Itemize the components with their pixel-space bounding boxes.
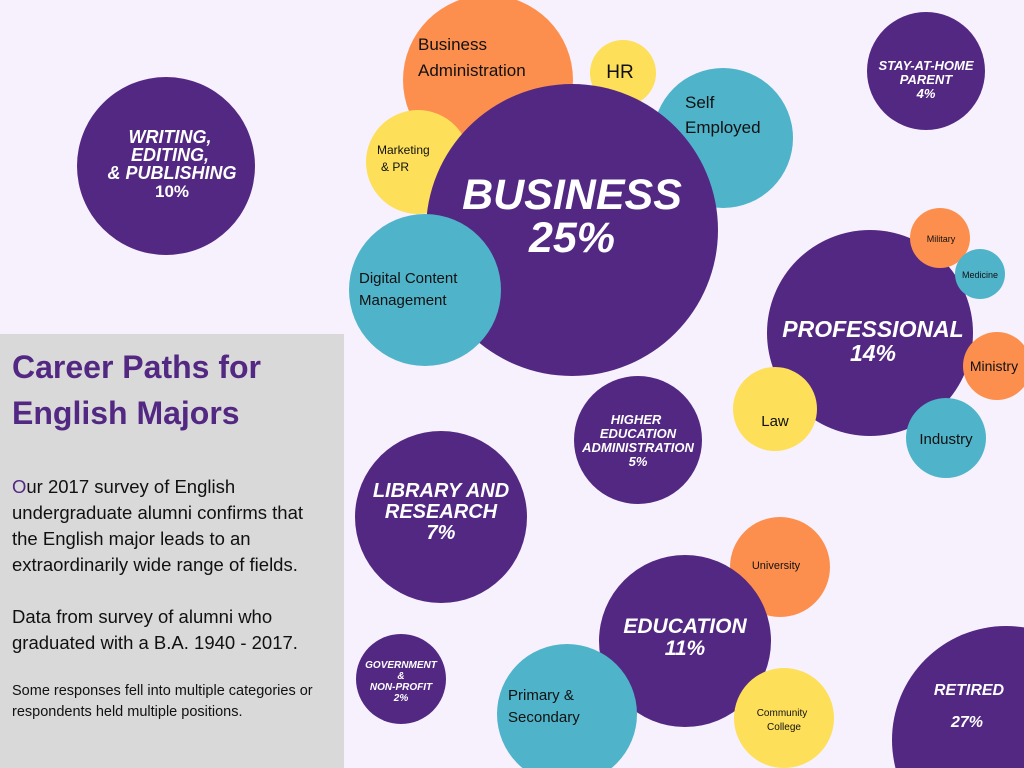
text block: footnote: Some responses fell into multiple categories or respondents held multiple positions. (12, 683, 313, 720)
bubble: business administration: Business (418, 35, 487, 54)
bubble: writing: 10% (155, 182, 189, 201)
bubble: law (733, 367, 817, 451)
bubble: higher education: ADMINISTRATION (581, 440, 694, 455)
bubble: ministry: Ministry (970, 358, 1018, 374)
bubble: higher education (574, 376, 702, 504)
bubble: stay-at-home parent: 4% (916, 86, 936, 101)
bubble: government: NON-PROFIT (370, 682, 433, 693)
bubble: business: 25% (528, 214, 615, 262)
bubble: higher education: 5% (629, 454, 648, 469)
title: Career Paths for (12, 349, 261, 385)
bubble: marketing: & PR (381, 160, 409, 174)
bubble: law: Law (761, 413, 789, 430)
title: English Majors (12, 395, 240, 431)
bubble: industry (906, 398, 986, 478)
bubble: digital content: Digital Content (359, 270, 458, 287)
bubble: writing: WRITING, (128, 127, 212, 147)
bubble: industry: Industry (919, 431, 973, 448)
bubble: higher education: HIGHER (611, 412, 662, 427)
bubble: medicine: Medicine (962, 270, 998, 280)
title (12, 349, 261, 431)
bubble: government: & (397, 671, 405, 682)
bubble: professional: 14% (850, 340, 896, 366)
bubble: stay-at-home parent: PARENT (900, 72, 953, 87)
bubble: marketing: Marketing (377, 143, 430, 157)
bubble: stay-at-home parent (867, 12, 985, 130)
bubble: business administration (403, 0, 573, 165)
bubble: higher education: EDUCATION (600, 426, 677, 441)
bubble: digital content (349, 214, 501, 366)
bubble: community college: Community (757, 708, 807, 719)
bubble: primary & secondary: Secondary (508, 709, 580, 726)
panel: intro text (0, 334, 344, 768)
bubble: business administration: Administration (418, 61, 526, 80)
bubble: primary & secondary (497, 644, 637, 768)
text block: description: Our 2017 survey of English undergraduate alumni confirms that the English major leads to an extraordinarily wide range of fields. (12, 476, 303, 575)
bubble: marketing (366, 110, 470, 214)
bubble: government: 2% (393, 693, 408, 704)
bubble: business (426, 84, 718, 376)
bubble: military (910, 208, 970, 268)
bubble: medicine (955, 249, 1005, 299)
bubble: retired: RETIRED (934, 682, 1005, 699)
bubble: library: LIBRARY AND (373, 480, 509, 502)
bubble: primary & secondary: Primary & (508, 687, 574, 704)
bubble: writing: EDITING, (131, 145, 209, 165)
bubble: retired (892, 626, 1024, 768)
bubble: government (356, 634, 446, 724)
bubble: library (355, 431, 527, 603)
bubble: retired: 27% (950, 714, 983, 731)
bubble: education (599, 555, 771, 727)
bubble: university (730, 517, 830, 617)
bubble: HR: HR (606, 62, 634, 83)
bubble: writing: & PUBLISHING (107, 163, 237, 183)
bubble: community college: College (767, 722, 801, 733)
bubble: writing (77, 77, 255, 255)
bubble: ministry (963, 332, 1024, 400)
bubble: self employed (653, 68, 793, 208)
bubble: government: GOVERNMENT (365, 660, 438, 671)
bubble: professional (767, 230, 973, 436)
bubble: education: 11% (665, 637, 706, 660)
bubble: university: University (752, 560, 801, 572)
bubble: community college (734, 668, 834, 768)
bubble: professional: PROFESSIONAL (782, 316, 964, 342)
bubble: stay-at-home parent: STAY-AT-HOME (878, 58, 974, 73)
bubble: library: 7% (427, 522, 456, 544)
bubble: digital content: Management (359, 292, 447, 309)
bubble: HR (590, 40, 656, 106)
bubble: business: BUSINESS (462, 171, 682, 219)
text block: data note: Data from survey of alumni who graduated with a B.A. 1940 - 2017. (12, 606, 298, 653)
bubble: self employed: Employed (685, 118, 761, 137)
bubble: military: Military (927, 234, 956, 244)
bubble: education: EDUCATION (623, 615, 747, 638)
bubble: self employed: Self (685, 93, 715, 112)
bubble: library: RESEARCH (385, 501, 498, 523)
